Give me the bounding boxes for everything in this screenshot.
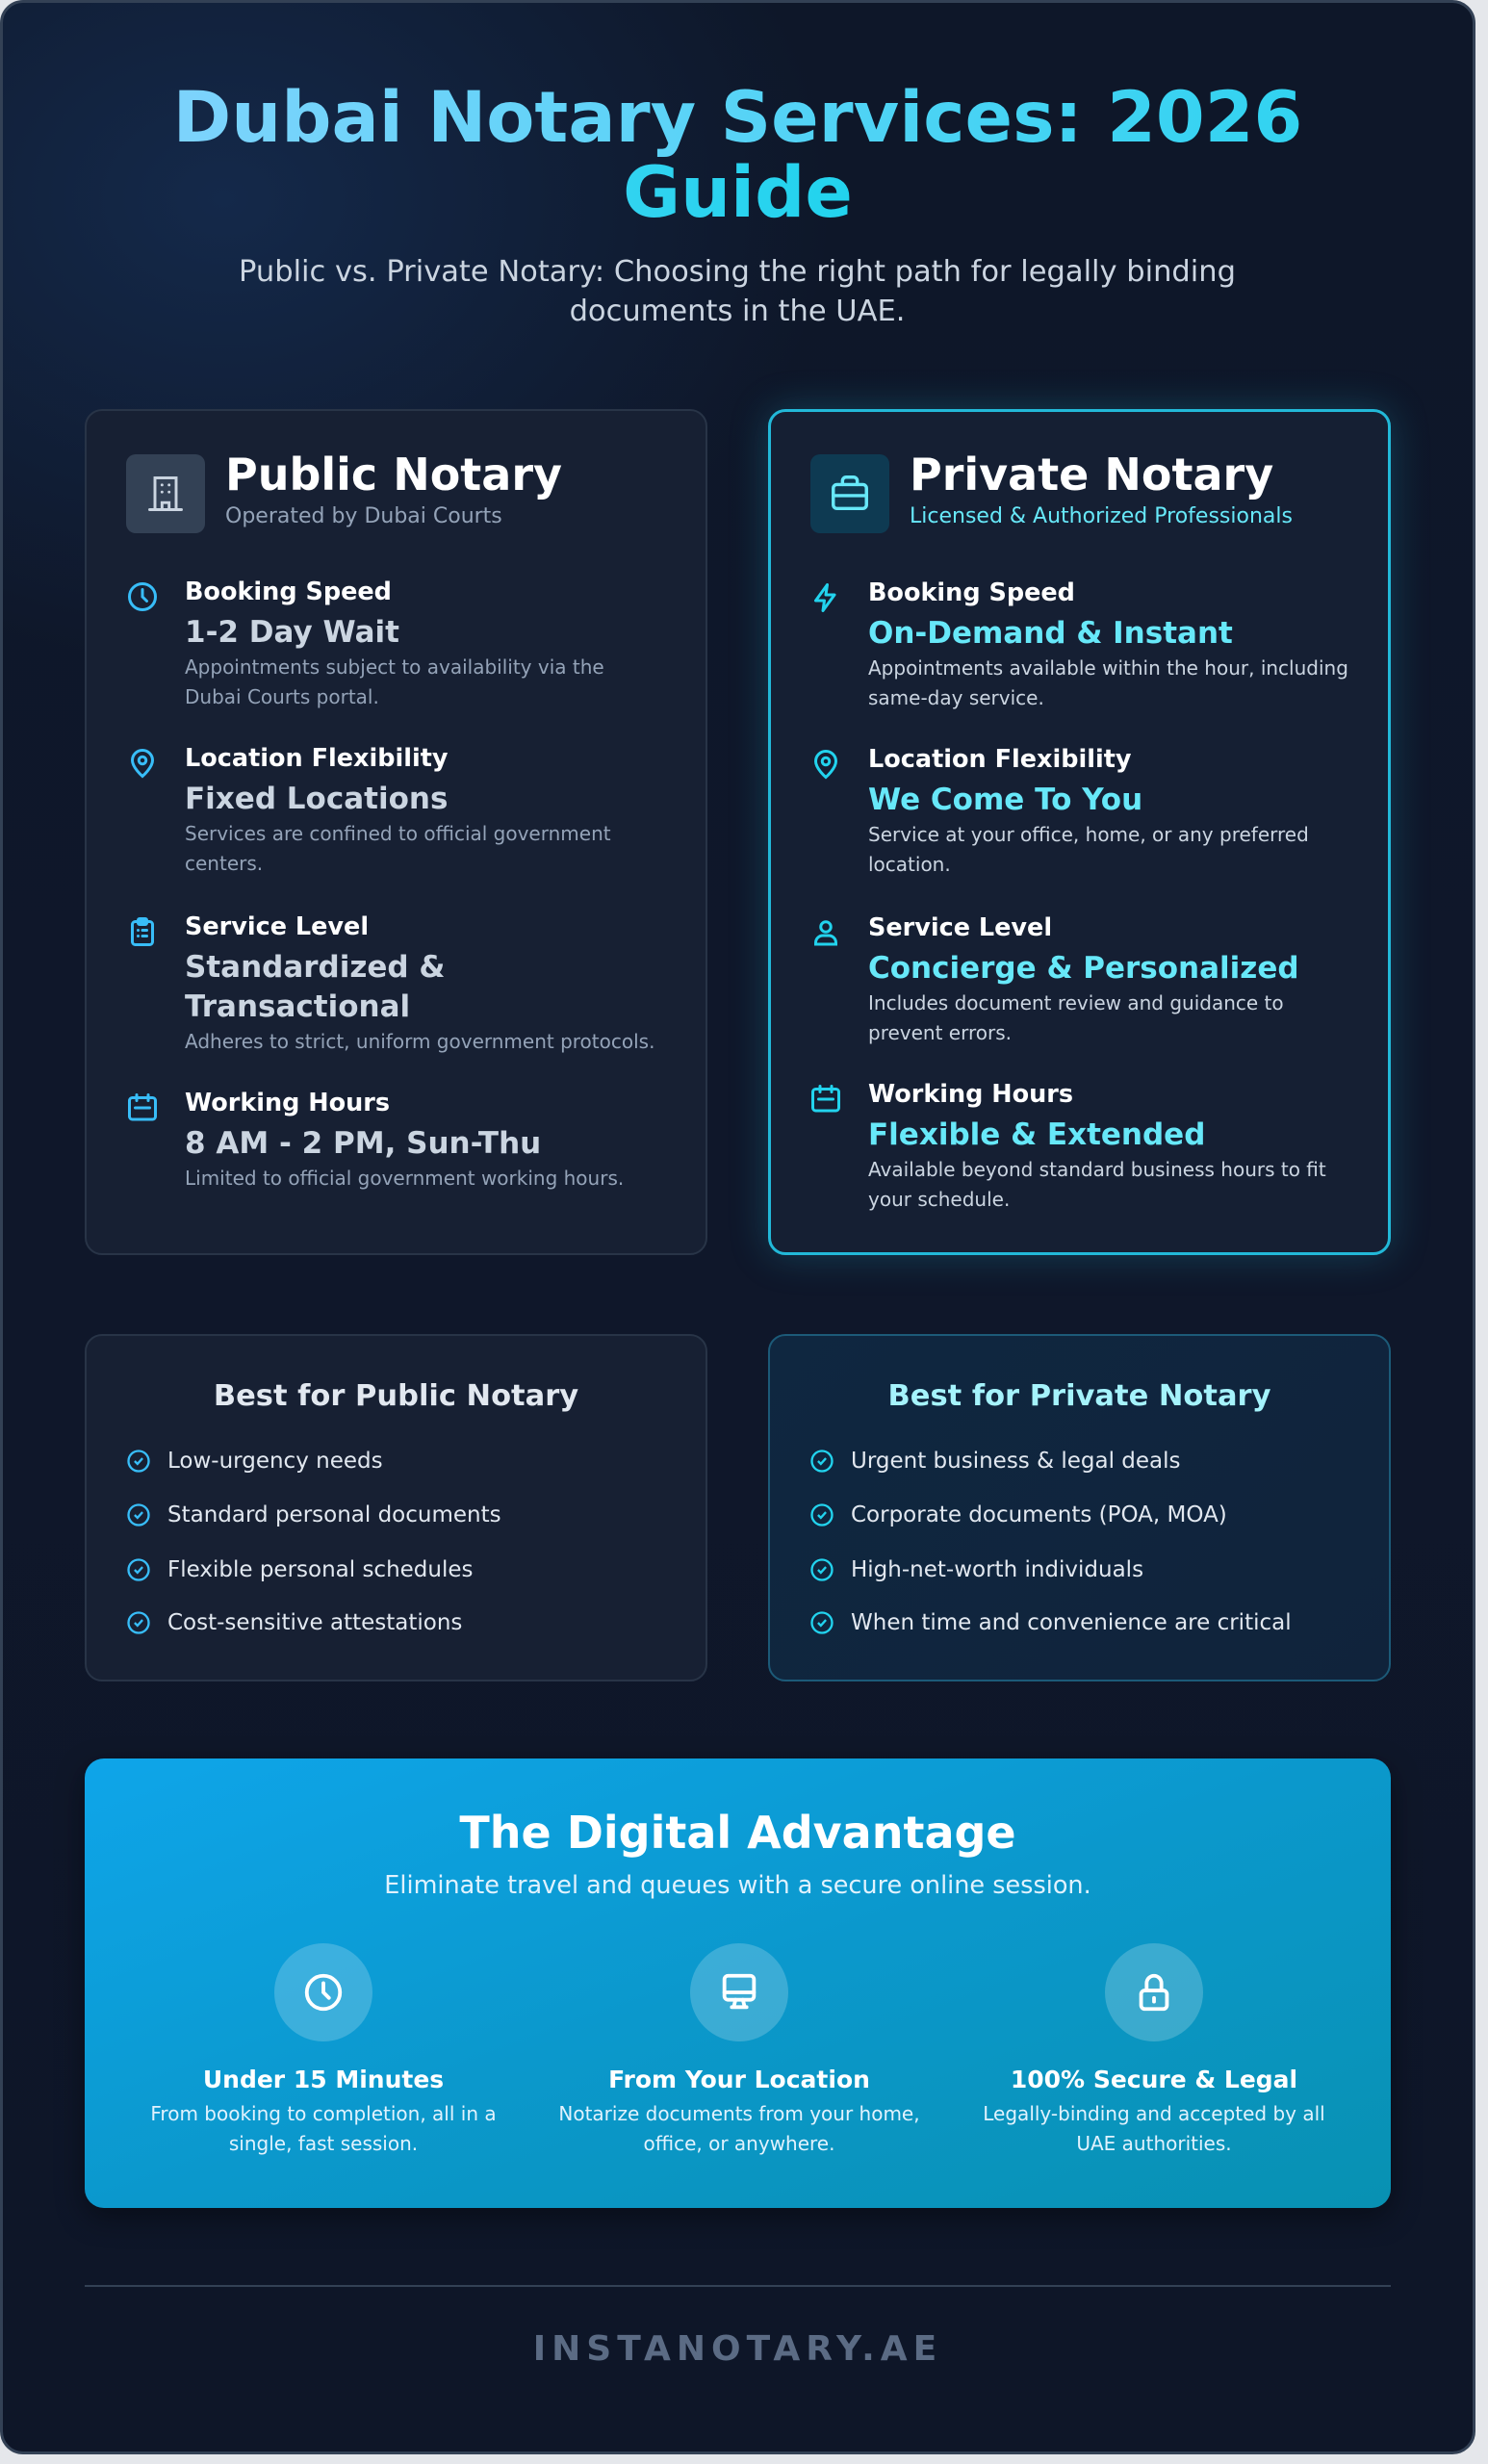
list: Cost-sensitive attestations <box>167 1610 462 1635</box>
panel: digital advantage <box>85 1758 1391 2208</box>
item: location: Location Flexibility <box>185 744 449 773</box>
feature: from your location <box>558 1943 920 2155</box>
item: service level: Transactional <box>185 989 410 1024</box>
title <box>173 77 1302 234</box>
heading: private notary: Private Notary <box>910 449 1273 500</box>
item: service level: Adheres to strict, uniform government protocols. <box>185 1030 654 1053</box>
item: service level: Includes document review and guidance to prevent errors. <box>868 991 1284 1044</box>
panel: private notary <box>768 409 1391 1255</box>
item: working hours: 8 AM - 2 PM, Sun-Thu <box>185 1126 541 1161</box>
heading: public notary: Operated by Dubai Courts <box>225 504 502 528</box>
icon: pin <box>814 750 837 780</box>
feature: under 15 minutes: Under 15 Minutes <box>203 2066 444 2093</box>
item: location: Fixed Locations <box>185 782 448 816</box>
footer brand: INSTANOTARY.AE <box>533 2329 942 2369</box>
item: location <box>131 744 611 875</box>
list: Urgent business & legal deals <box>851 1449 1180 1474</box>
icon: building <box>126 454 205 533</box>
heading: private notary: Licensed & Authorized Professionals <box>910 504 1293 528</box>
item: booking speed: Booking Speed <box>185 578 392 606</box>
list: Flexible personal schedules <box>167 1557 474 1582</box>
list: Standard personal documents <box>167 1502 501 1527</box>
feature: secure & legal <box>983 1943 1325 2155</box>
item: booking speed <box>128 578 604 708</box>
item: location: We Come To You <box>868 783 1142 817</box>
icon: clipboard <box>131 917 154 946</box>
icon: lock <box>1105 1943 1203 2041</box>
item: location: Services are confined to official government centers. <box>185 822 611 875</box>
item: working hours: Available beyond standard business hours to fit your schedule. <box>868 1158 1326 1211</box>
heading: The Digital Advantage <box>459 1807 1016 1859</box>
item: working hours: Flexible & Extended <box>868 1117 1205 1152</box>
panel: best for private <box>768 1334 1391 1681</box>
subtitle: Public vs. Private Notary: Choosing the right path for legally binding documents in the UAE. <box>239 255 1236 328</box>
icon: pin <box>131 749 154 778</box>
feature: from your location: From Your Location <box>608 2066 870 2093</box>
item: booking speed <box>814 578 1348 709</box>
item: service level: Service Level <box>868 913 1052 942</box>
list: High-net-worth individuals <box>851 1557 1143 1582</box>
feature: secure & legal: 100% Secure & Legal <box>1011 2066 1297 2093</box>
item: service level: Concierge & Personalized <box>868 951 1299 986</box>
list <box>127 1449 501 1635</box>
item: booking speed: On-Demand & Instant <box>868 616 1233 651</box>
item: location: Location Flexibility <box>868 745 1132 774</box>
heading: Best for Private Notary <box>888 1379 1270 1413</box>
item: working hours <box>128 1089 624 1190</box>
title: Dubai Notary Services: 2026 <box>173 77 1302 159</box>
item: location: Service at your office, home, or any preferred location. <box>868 823 1309 876</box>
item: booking speed: Booking Speed <box>868 578 1075 607</box>
heading: public notary: Public Notary <box>225 449 562 500</box>
icon: calendar <box>128 1093 157 1120</box>
item: working hours: Limited to official government working hours. <box>185 1167 624 1190</box>
item: working hours: Working Hours <box>185 1089 390 1117</box>
list: When time and convenience are critical <box>851 1610 1292 1635</box>
heading: private notary <box>910 449 1293 528</box>
subheading: Eliminate travel and queues with a secure online session. <box>384 1871 1091 1900</box>
feature: from your location: Notarize documents from your home, office, or anywhere. <box>558 2102 920 2155</box>
item: service level: Service Level <box>185 912 369 941</box>
list <box>810 1449 1292 1635</box>
item: service level <box>814 913 1299 1044</box>
item: location <box>814 745 1309 876</box>
feature: under 15 minutes <box>150 1943 497 2155</box>
list: Corporate documents (POA, MOA) <box>851 1502 1227 1527</box>
title: Guide <box>623 152 853 234</box>
heading: Best for Public Notary <box>214 1379 578 1413</box>
panel: best for public <box>85 1334 707 1681</box>
heading: public notary <box>225 449 562 528</box>
panel: public notary <box>85 409 707 1255</box>
item: working hours: Working Hours <box>868 1080 1073 1109</box>
feature: under 15 minutes: From booking to completion, all in a single, fast session. <box>150 2102 497 2155</box>
list: Low-urgency needs <box>167 1449 383 1474</box>
icon: calendar <box>811 1085 840 1113</box>
item: booking speed: Appointments available within the hour, including same-day service. <box>868 656 1348 709</box>
icon: clock <box>128 582 157 611</box>
item: booking speed: 1-2 Day Wait <box>185 615 399 650</box>
icon: briefcase <box>810 454 889 533</box>
icon: monitor <box>690 1943 788 2041</box>
item: service level: Standardized & <box>185 950 445 985</box>
item: working hours <box>811 1080 1326 1211</box>
icon: lightning <box>814 583 836 612</box>
icon: user <box>814 920 837 945</box>
feature: secure & legal: Legally-binding and accepted by all UAE authorities. <box>983 2102 1325 2155</box>
item: booking speed: Appointments subject to availability via the Dubai Courts portal. <box>185 655 604 708</box>
item: service level <box>131 912 654 1053</box>
icon: clock <box>274 1943 372 2041</box>
